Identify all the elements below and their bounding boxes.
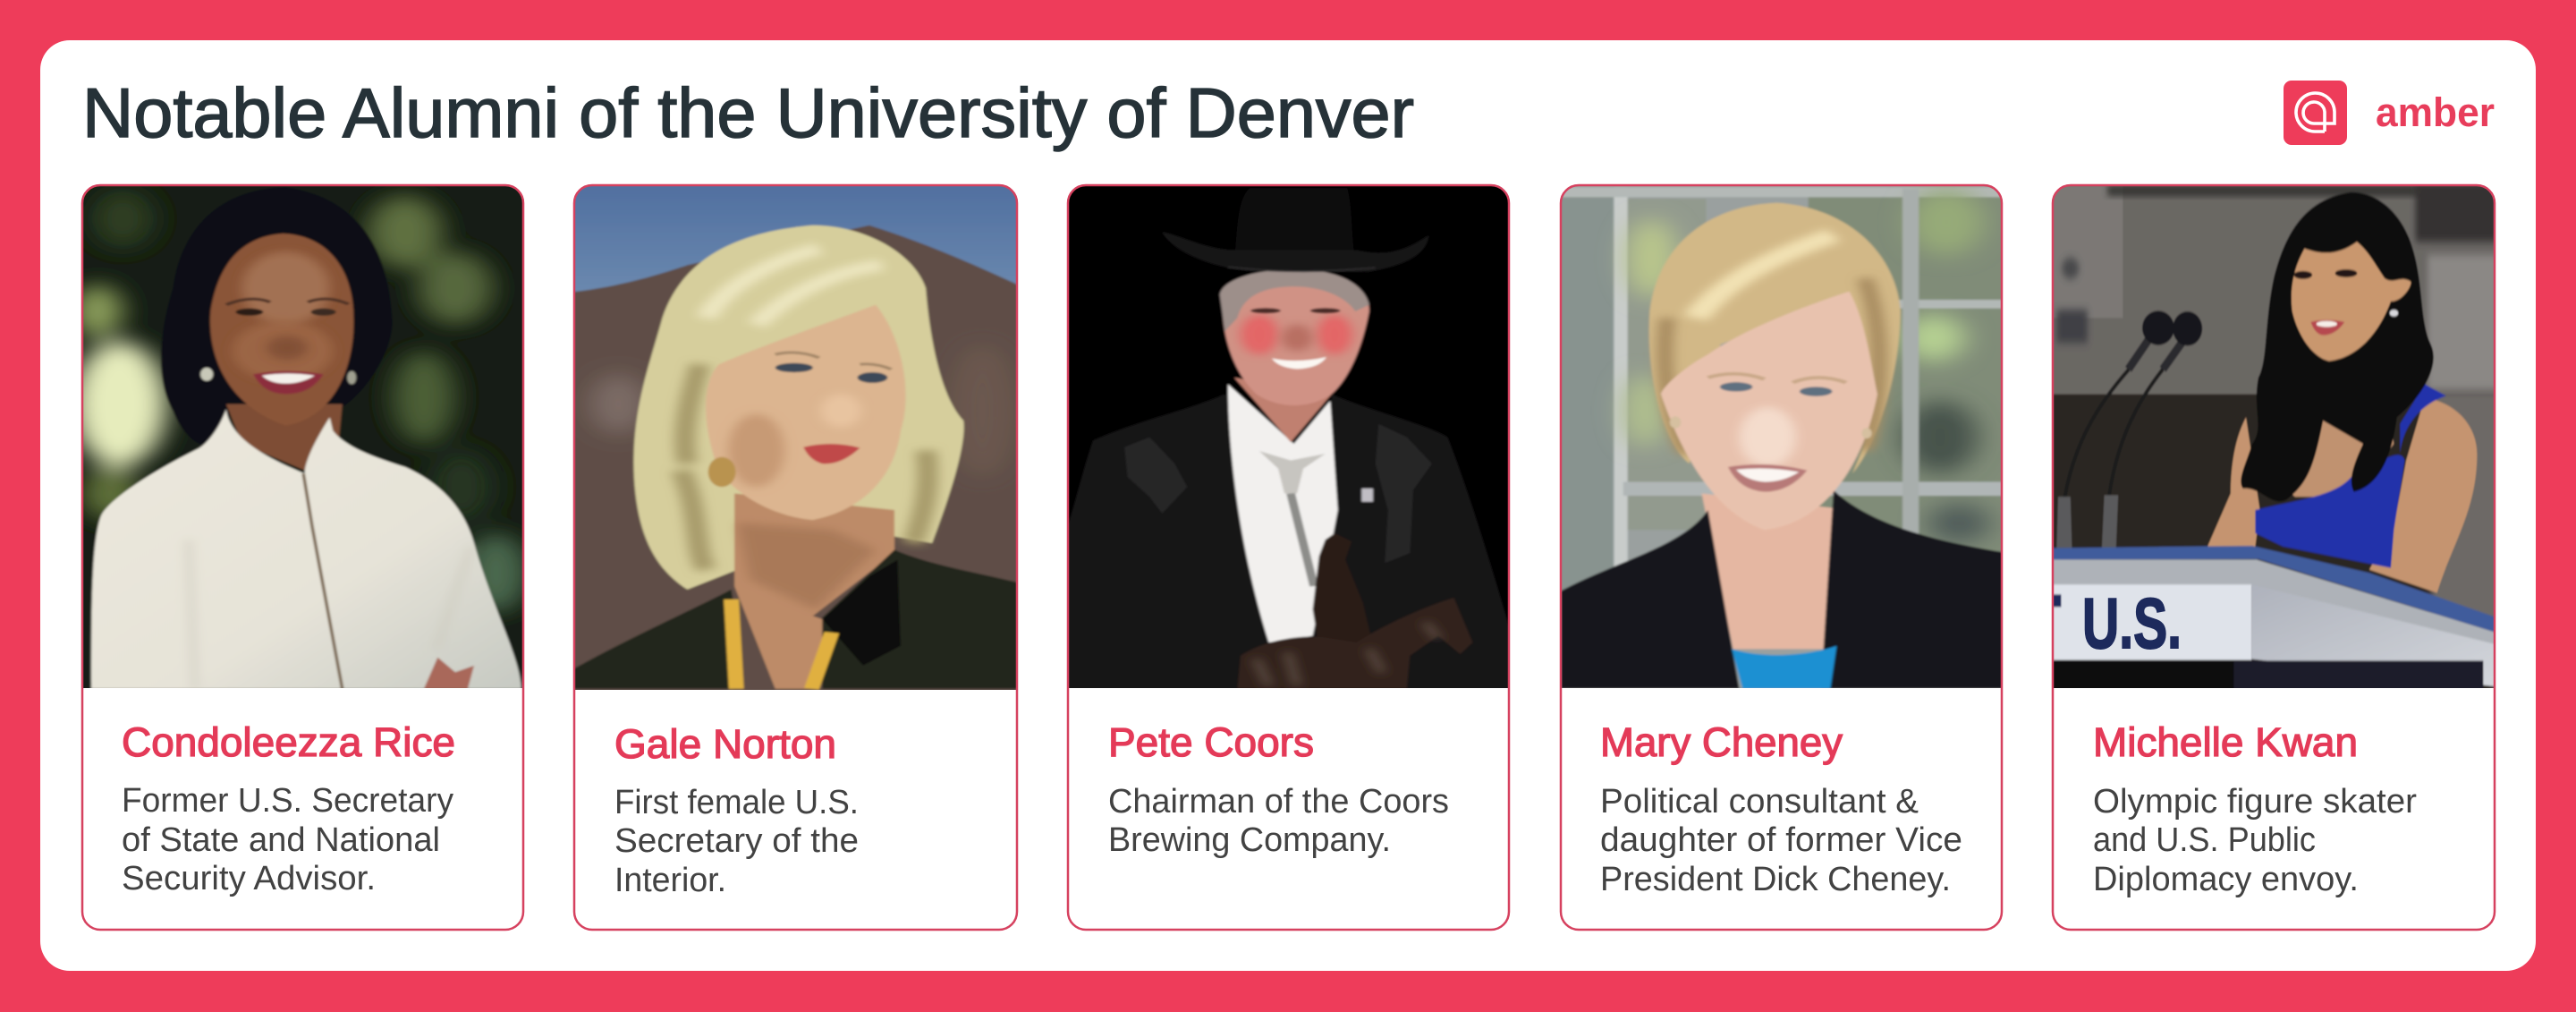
description: Political consultant & <box>1600 783 1919 821</box>
description <box>122 782 453 897</box>
panel: Pete Coors <box>1055 179 1532 930</box>
description: of State and National <box>122 821 440 859</box>
card border <box>1561 185 2002 930</box>
photo: Gale Norton portrait <box>575 186 1016 690</box>
name: Mary Cheney <box>1600 719 1843 765</box>
description: President Dick Cheney. <box>1600 861 1951 898</box>
description: and U.S. Public <box>2093 821 2316 859</box>
panel: Condoleezza Rice <box>80 184 524 931</box>
name: Gale Norton <box>614 721 836 767</box>
card border <box>2053 185 2495 930</box>
description: Former U.S. Secretary <box>122 782 453 820</box>
description <box>2093 783 2417 898</box>
description: daughter of former Vice <box>1600 821 1962 859</box>
description <box>614 784 859 899</box>
logo: amber <box>2284 81 2495 145</box>
description: First female U.S. <box>614 784 859 821</box>
description: Diplomacy envoy. <box>2093 861 2359 898</box>
icon: amber mark <box>2284 81 2347 145</box>
photo: Condoleezza Rice portrait <box>83 186 522 688</box>
description: Secretary of the <box>614 822 859 860</box>
name: Pete Coors <box>1108 719 1314 765</box>
card border <box>82 185 523 930</box>
description: Chairman of the Coors <box>1108 783 1449 821</box>
podium sign lettering: U.S. <box>2082 583 2182 663</box>
panel: Gale Norton <box>562 179 1038 930</box>
description <box>1600 783 1962 898</box>
name: Michelle Kwan <box>2093 719 2358 765</box>
description: Olympic figure skater <box>2093 783 2417 821</box>
title: Notable Alumni of the University of Denver <box>82 73 1414 152</box>
panel: Mary Cheney <box>1551 179 2028 930</box>
description: Interior. <box>614 862 726 899</box>
name: Condoleezza Rice <box>122 719 455 765</box>
photo: Pete Coors portrait <box>1069 186 1508 688</box>
description <box>1108 783 1449 859</box>
photo: Mary Cheney portrait <box>1562 186 2001 688</box>
wordmark: amber <box>2376 89 2495 135</box>
card border <box>574 185 1017 930</box>
description: Security Advisor. <box>122 860 376 897</box>
panel: Michelle Kwan <box>2046 179 2502 930</box>
photo: Michelle Kwan portrait <box>2046 179 2502 709</box>
description: Brewing Company. <box>1108 821 1391 859</box>
card border <box>1068 185 1509 930</box>
